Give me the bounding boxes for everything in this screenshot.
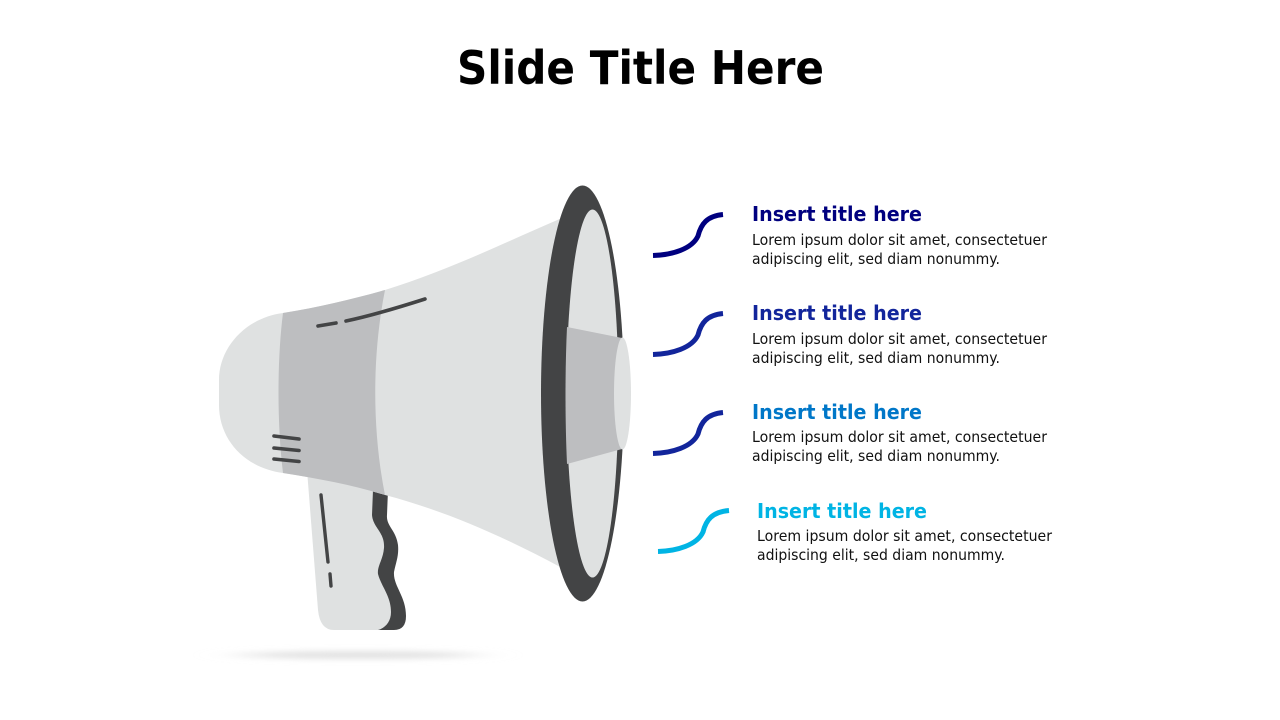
speaker cone [566,327,622,464]
item 1 body: Lorem ipsum dolor sit amet, consectetuer [752,231,1048,249]
squiggle 2 [653,314,723,354]
item 4 [658,499,1053,564]
speaker tip [614,338,631,450]
horn inner face [566,210,618,578]
horn dark rim [541,186,624,602]
item 2 [653,301,1048,367]
horn body [219,218,562,568]
band side vent lines [274,436,299,462]
item 4 heading: Insert title here [757,499,927,523]
item 3 body: Lorem ipsum dolor sit amet, consectetuer [752,428,1048,446]
icon: megaphone [219,186,631,659]
item 3 heading: Insert title here [752,400,922,424]
handle highlight lines [321,495,331,586]
item 4 body: Lorem ipsum dolor sit amet, consectetuer [757,527,1053,545]
item 2 body: adipiscing elit, sed diam nonummy. [752,349,1000,367]
item 2 heading: Insert title here [752,301,922,325]
item 2 body: Lorem ipsum dolor sit amet, consectetuer [752,330,1048,348]
item 1 [653,202,1048,268]
handle dark grip [372,490,406,630]
squiggle 1 [653,214,723,256]
title: Slide Title Here [457,41,824,95]
item 1 heading: Insert title here [752,202,922,226]
item 4 body: adipiscing elit, sed diam nonummy. [757,546,1005,564]
megaphone floor shadow [240,651,476,659]
megaphone handle [307,470,397,630]
item 3 [653,400,1048,465]
item 1 body: adipiscing elit, sed diam nonummy. [752,250,1000,268]
squiggle 3 [653,412,723,454]
band top highlight lines [318,299,425,326]
horn grey band [278,290,385,495]
squiggle 4 [658,510,729,552]
item 3 body: adipiscing elit, sed diam nonummy. [752,447,1000,465]
